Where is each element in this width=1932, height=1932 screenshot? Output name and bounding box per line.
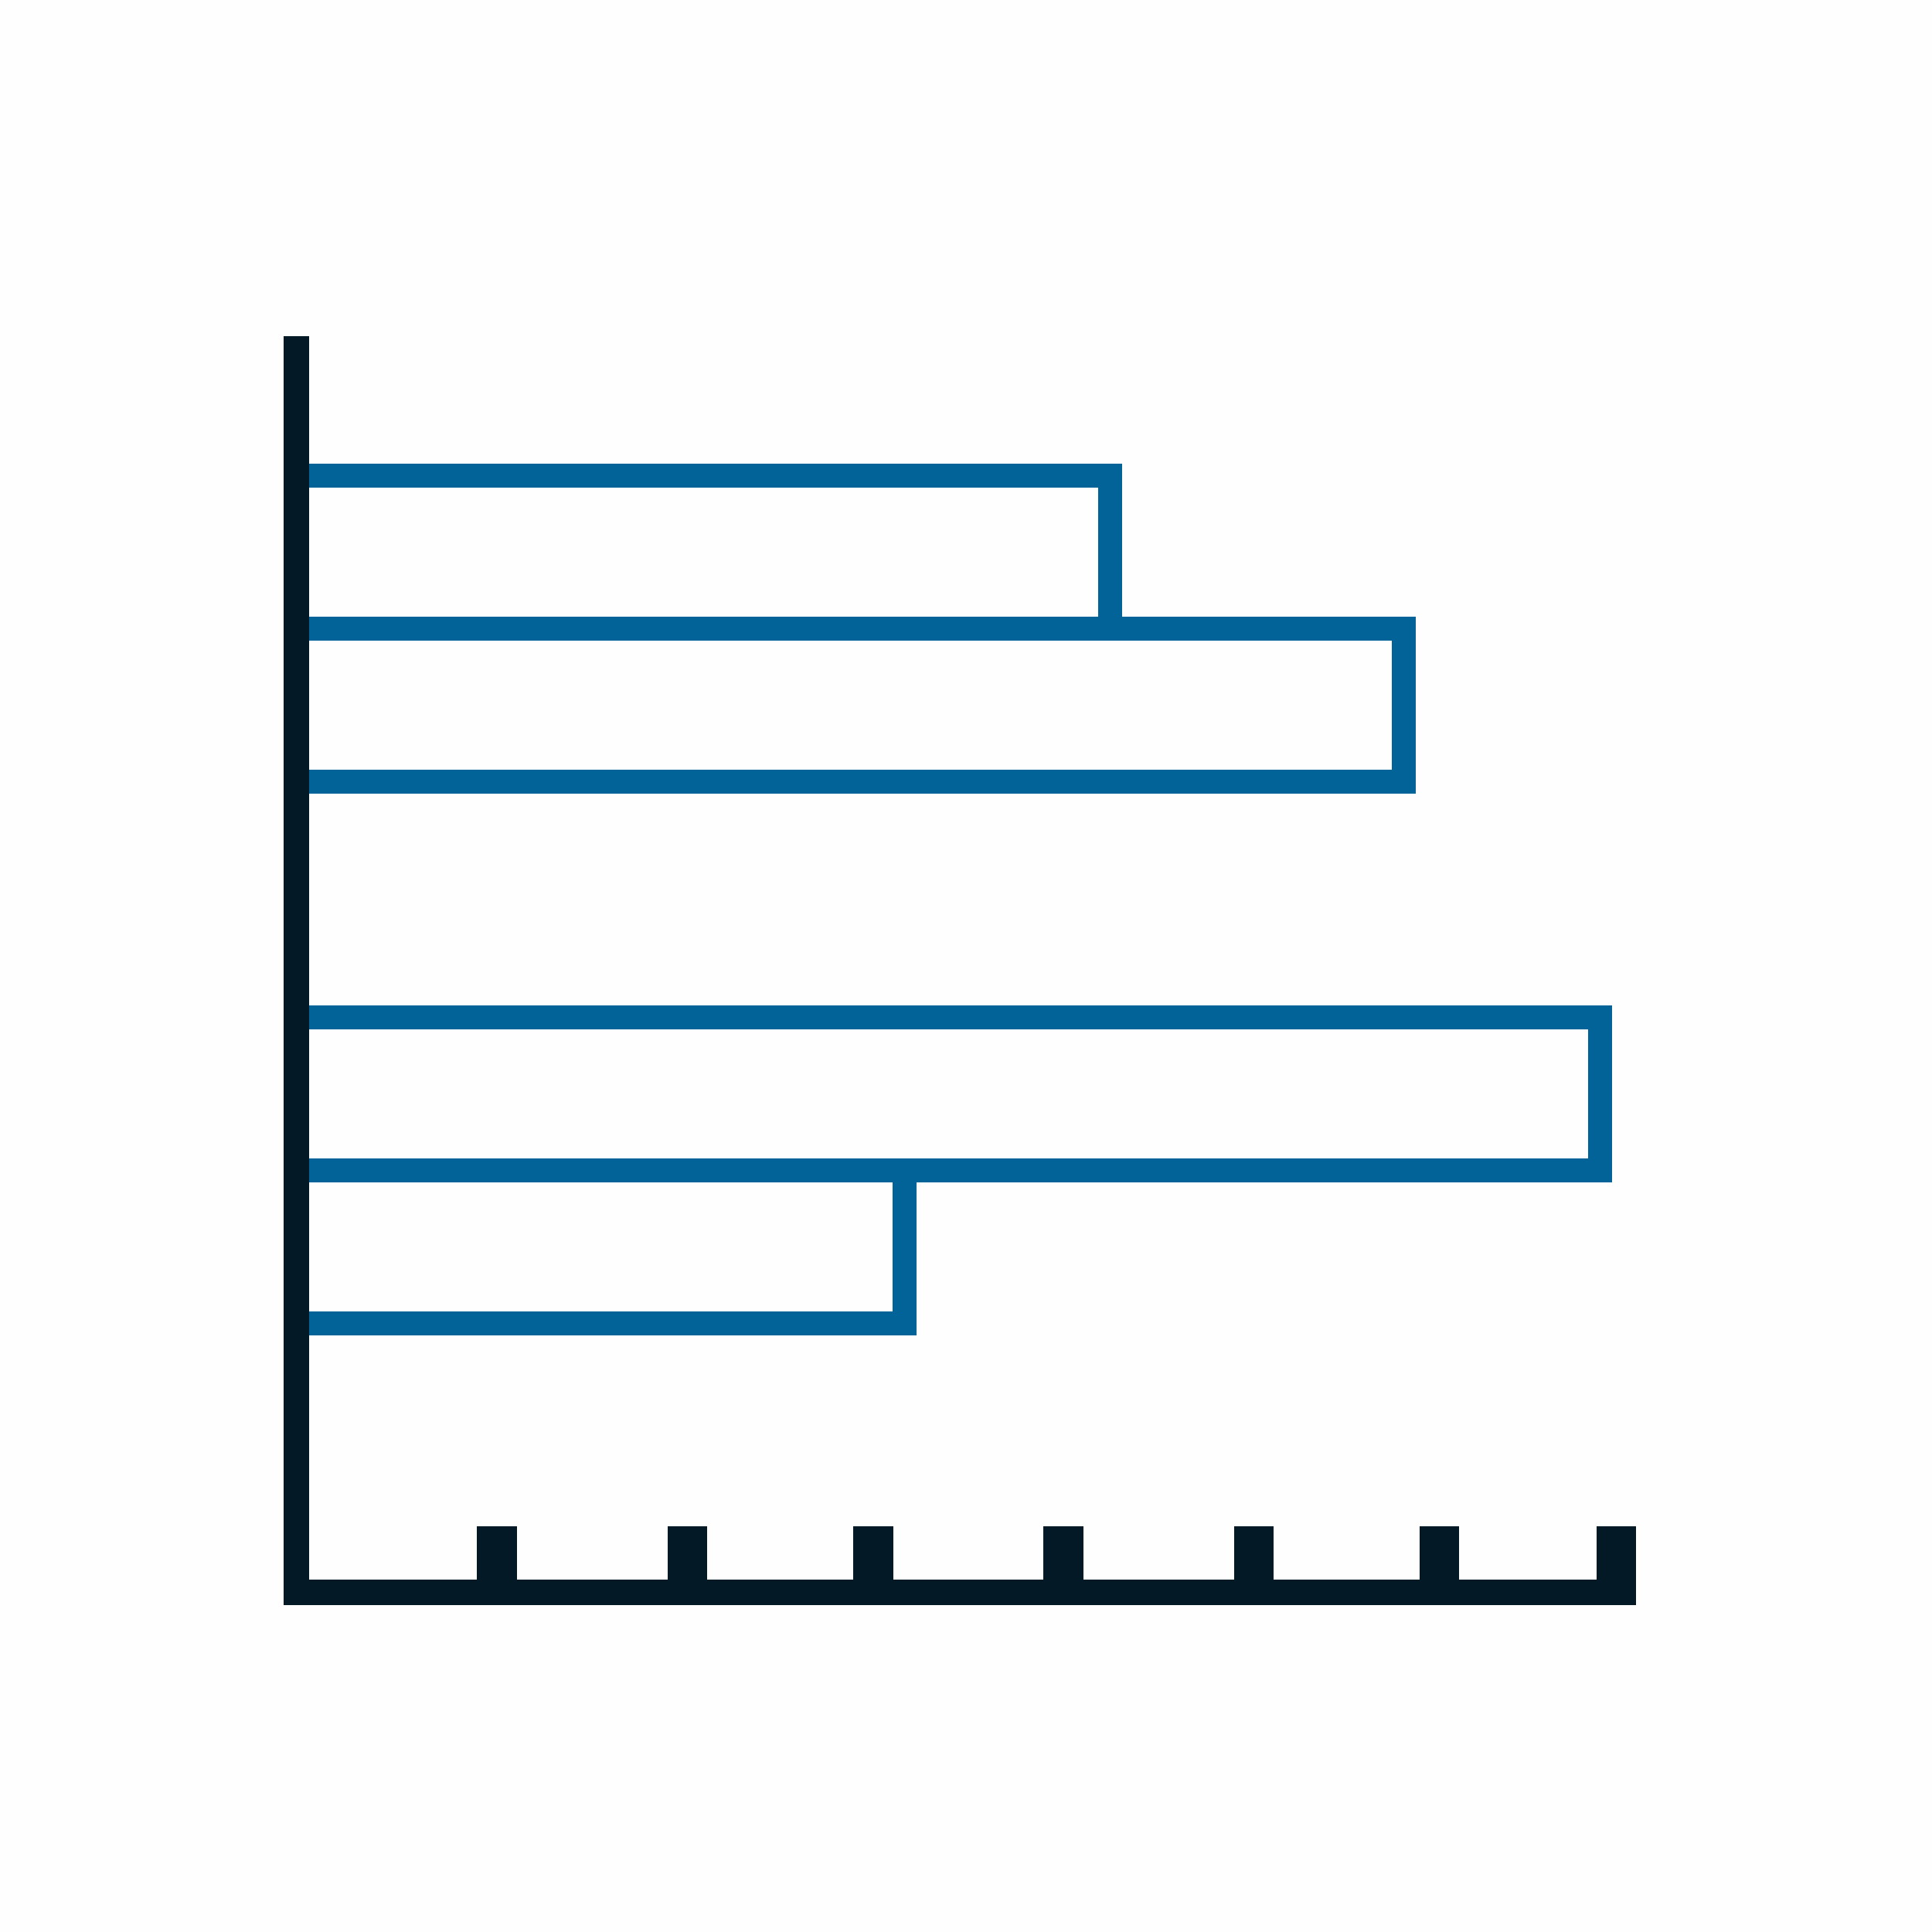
- bar 1: [294, 476, 1110, 628]
- tick marks: [477, 1526, 1636, 1580]
- bar 4: [294, 1171, 904, 1323]
- horizontal axis: [284, 1580, 1636, 1605]
- axes with tick marks: [284, 336, 1636, 1605]
- bar 3: [294, 1017, 1600, 1170]
- bars: outlined horizontal bars: [294, 476, 1600, 1323]
- bar 2: [294, 629, 1403, 782]
- vertical axis: [284, 336, 309, 1605]
